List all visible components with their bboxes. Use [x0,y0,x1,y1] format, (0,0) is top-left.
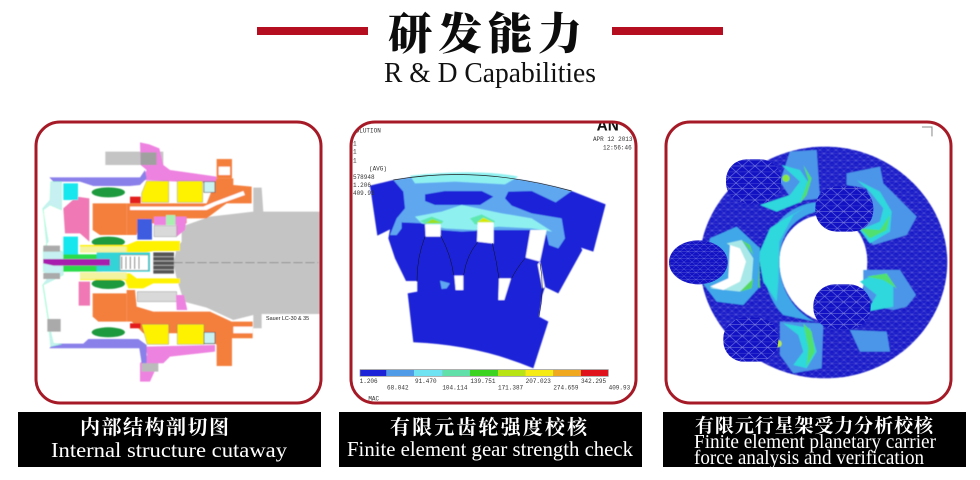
gear stress plot: 1 [353,157,357,164]
caption: carrier: 有限元行星架受力分析校核 [695,414,935,437]
gear stress plot: 1.206 [353,182,371,189]
gear stress plot: APR 12 2013 [593,136,633,143]
gear stress plot: 578948 [353,174,375,181]
gear stress plot: 1 [353,149,357,156]
panel border: gear [351,122,636,403]
panel border: carrier [666,122,951,403]
caption: cutaway: Internal structure cutaway [51,438,288,462]
caption: cutaway [18,412,321,467]
gear stress plot: AN [597,117,619,134]
gear stress plot: MAC [368,395,380,402]
panel: internal structure cutaway [42,142,320,382]
right title rule [612,27,723,35]
subtitle: R & D Capabilities [384,58,596,89]
caption: carrier: force analysis and verification [694,447,924,469]
gear stress plot: 12:56:46 [603,145,632,152]
cutaway diagram [43,142,320,382]
panel border: cutaway [36,122,321,403]
cutaway diagram: Sauer LC-30 & 35 [266,316,309,322]
carrier FEA model [669,127,947,378]
caption: gear [339,412,642,467]
gear stress plot: (AVG) [369,165,387,172]
caption: gear: 有限元齿轮强度校核 [390,415,589,439]
title: 研发能力 [388,10,582,59]
caption: carrier [663,412,966,469]
gear stress plot: 409.93 [609,385,631,392]
gear stress plot [353,117,633,402]
gear stress plot: 139.751 [470,378,496,385]
gear stress plot: 91.470 [415,378,437,385]
left title rule [257,27,368,35]
gear stress plot: 274.659 [553,385,579,392]
gear stress plot: OLUTION [356,127,381,134]
gear stress plot: 342.295 [581,378,607,385]
gear stress plot: 207.023 [526,378,551,385]
panel: planetary carrier analysis [666,122,951,403]
caption: cutaway: 内部结构剖切图 [80,415,229,439]
gear stress plot: 409.93 [353,190,375,197]
gear stress plot: 1 [353,141,357,148]
panel: gear strength check [351,117,636,403]
gear stress plot: 1.206 [360,378,378,385]
gear stress plot: 171.387 [498,385,524,392]
caption: gear: Finite element gear strength check [347,437,633,461]
gear stress plot: 68.042 [387,385,409,392]
caption: carrier: Finite element planetary carrier [694,431,936,453]
gear stress plot: 104.114 [442,385,468,392]
